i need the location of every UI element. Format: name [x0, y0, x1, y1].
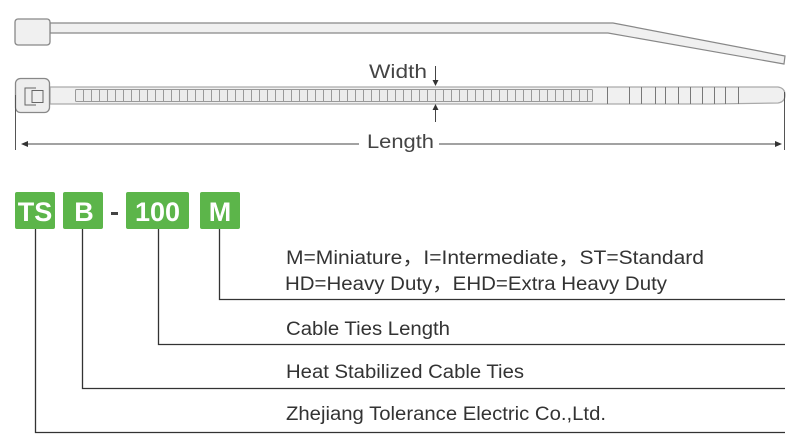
hyphen [111, 212, 118, 215]
description: manufacturer: Zhejiang Tolerance Electric Co.,Ltd. [286, 404, 606, 425]
side view cable tie [15, 19, 785, 64]
leader lines [36, 229, 785, 432]
length dimension [16, 92, 784, 153]
tail segments [608, 87, 738, 104]
width dimension [369, 62, 438, 122]
description: heat stabilized: Heat Stabilized Cable Ties [286, 362, 524, 383]
badge: M [200, 192, 240, 229]
badge: 100: 100 [135, 197, 180, 227]
badge: 100 [126, 192, 189, 229]
badge: M: M [209, 197, 231, 227]
description: length: Cable Ties Length [286, 319, 450, 340]
badge: TS: TS [18, 197, 52, 227]
width dimension: Width [369, 62, 427, 83]
description: size codes line 2: HD=Heavy Duty，EHD=Extra Heavy Duty [285, 274, 668, 295]
ratchet teeth [76, 90, 592, 102]
badge: TS [15, 192, 55, 229]
badge: B: B [74, 197, 94, 227]
badge: B [63, 192, 103, 229]
length dimension: Length [367, 132, 434, 153]
description: size codes line 1: M=Miniature，I=Intermediate，ST=Standard [286, 248, 704, 269]
top view cable tie [16, 78, 785, 112]
